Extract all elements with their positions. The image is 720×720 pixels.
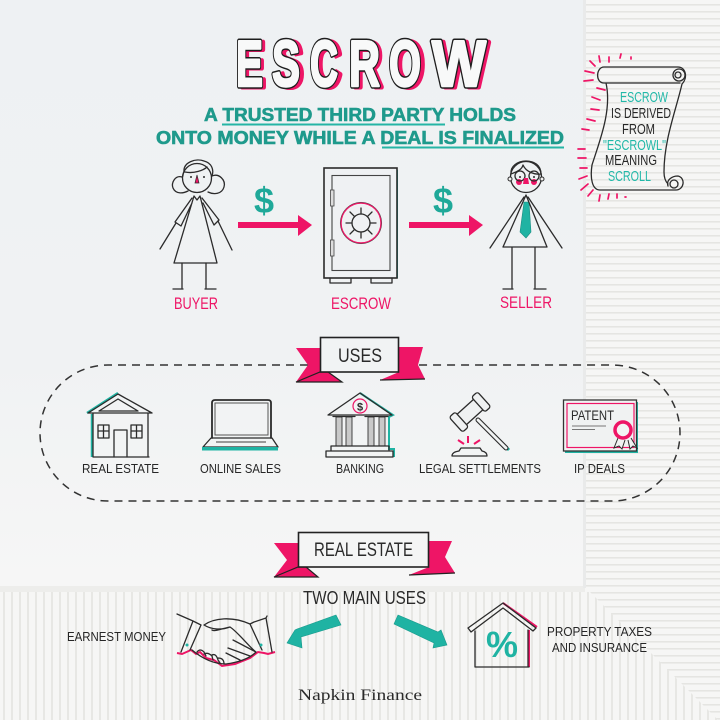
use: legal settlements: LEGAL SETTLEMENTS (419, 461, 541, 476)
rays (578, 54, 631, 201)
use: banking: BANKING (336, 461, 384, 476)
subtitle (156, 105, 564, 148)
label: property taxes and insurance (547, 624, 652, 655)
label: property taxes and insurance: PROPERTY TAXES (547, 624, 652, 639)
scroll text: IS DERIVED (611, 105, 671, 122)
icon: safe (324, 168, 398, 283)
use: banking (326, 393, 394, 476)
icon: seller (490, 161, 562, 289)
use: online sales: ONLINE SALES (200, 461, 281, 476)
uses banner: USES (338, 346, 382, 367)
arrow: to property taxes (394, 615, 447, 648)
scroll text: MEANING (605, 152, 657, 169)
scroll text: ESCROW (620, 89, 669, 106)
use: real estate: REAL ESTATE (82, 461, 159, 476)
title: C (314, 28, 342, 101)
title: S (276, 28, 304, 101)
label: seller: SELLER (500, 293, 552, 312)
title: R (349, 27, 380, 100)
title: E (239, 28, 266, 101)
title: S (272, 27, 300, 100)
icon: scroll (591, 67, 685, 190)
icon: handshake (177, 614, 275, 666)
label: earnest money: EARNEST MONEY (67, 629, 166, 644)
label: property taxes and insurance: AND INSURANCE (552, 640, 647, 655)
title: O (389, 27, 421, 100)
uses banner (296, 338, 425, 382)
arrow with dollar: buyer to escrow: $ (254, 180, 274, 221)
arrow: to earnest money (287, 615, 341, 648)
arrow with dollar: buyer to escrow (238, 180, 312, 236)
use: ip deals: IP DEALS (574, 461, 625, 476)
subtitle: ONTO MONEY WHILE A DEAL IS FINALIZED (156, 128, 564, 148)
title: E (236, 27, 263, 100)
use: ip deals (564, 400, 638, 476)
title: R (352, 28, 383, 101)
title: R (349, 27, 380, 100)
title: W (432, 27, 487, 100)
panel: uses dashed outline (40, 365, 680, 501)
scroll text (603, 89, 671, 185)
title: W (435, 28, 490, 101)
arrow with dollar: escrow to seller (409, 180, 483, 236)
real estate banner: REAL ESTATE (314, 540, 413, 561)
title: E (236, 27, 263, 100)
brand: napkin finance: Napkin Finance (298, 687, 422, 704)
panel: scroll fact (578, 54, 685, 201)
icon: percent house: % (486, 624, 518, 665)
label: buyer: BUYER (174, 294, 218, 313)
use: real estate (82, 393, 159, 476)
title: O (393, 28, 425, 101)
label: escrow: ESCROW (331, 294, 391, 313)
title (236, 27, 490, 101)
use: ip deals: PATENT (571, 407, 614, 423)
title: W (432, 27, 487, 100)
scroll text: "ESCROWL" (603, 137, 666, 154)
title: C (310, 27, 338, 100)
heading: two main uses: TWO MAIN USES (303, 588, 426, 608)
scroll text: SCROLL (608, 168, 651, 185)
real estate banner (274, 532, 455, 577)
scroll text: FROM (622, 121, 655, 138)
arrow with dollar: escrow to seller: $ (433, 180, 453, 221)
use: legal settlements (419, 392, 541, 476)
icon: percent house (468, 603, 537, 667)
icon: buyer (160, 160, 232, 289)
title: C (310, 27, 338, 100)
subtitle: A TRUSTED THIRD PARTY HOLDS (204, 105, 516, 125)
use: online sales (200, 400, 281, 476)
title: O (389, 27, 421, 100)
title: S (272, 27, 300, 100)
use: banking: $ (357, 402, 363, 414)
